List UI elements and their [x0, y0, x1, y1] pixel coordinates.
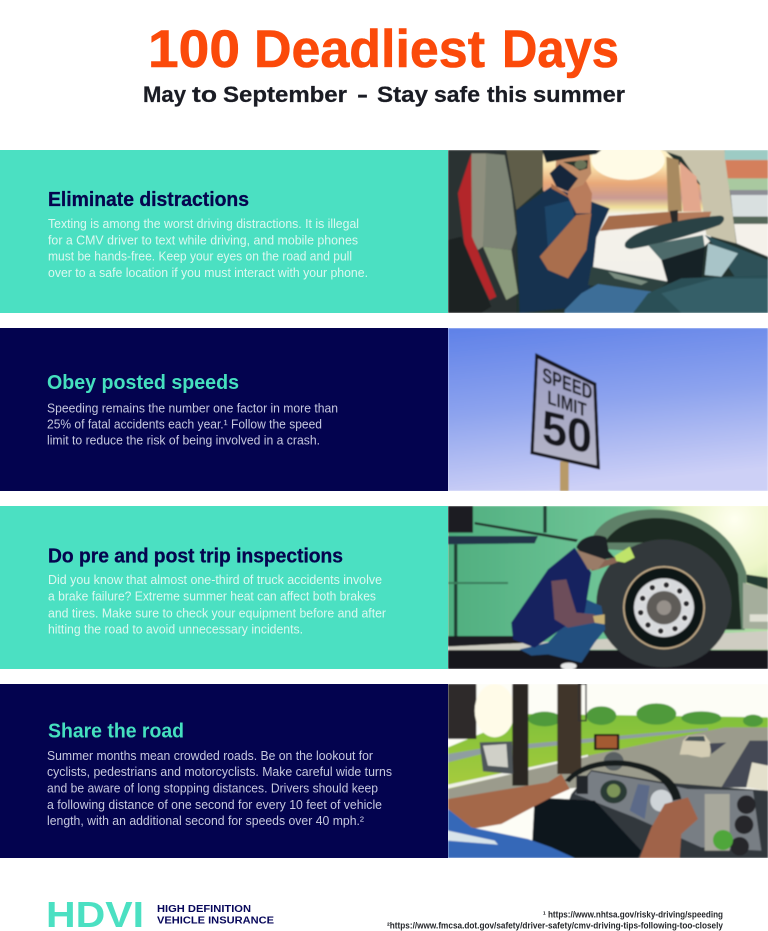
panel: share the road: [0, 684, 768, 858]
icon: steering wheel: [531, 760, 681, 858]
subtitle: Stay: [377, 82, 429, 107]
heading: inspections: Do pre and post trip inspections: [48, 546, 343, 568]
body text: inspections: and tires. Make sure to check your equipment before and after: [48, 606, 386, 620]
title: 100: [148, 20, 240, 79]
subtitle: safe: [434, 82, 480, 107]
icon: speed limit sign: SPEED: [542, 363, 592, 405]
body text: inspections: a brake failure? Extreme summer heat can affect both brakes: [48, 590, 376, 604]
icon: mechanic: [511, 535, 635, 669]
panel: obey posted speeds: [0, 328, 768, 491]
photo: speed limit sign: [448, 328, 768, 491]
icon: dashboard: [548, 762, 768, 858]
body text: share the road: and be aware of long stopping distances. Drivers should keep: [47, 782, 378, 796]
logo: [46, 894, 274, 931]
body text: share the road: Summer months mean crowded roads. Be on the lookout for: [47, 749, 373, 763]
title: [148, 20, 619, 79]
icon: speed limit sign: [530, 353, 600, 470]
icon: tire and wheel: [596, 539, 732, 667]
photo: driver on phone: [448, 150, 768, 313]
body text: obey posted speeds: 25% of fatal accidents each year.¹ Follow the speed: [47, 417, 322, 431]
body text: eliminate distractions: Texting is among the worst driving distractions. It is illegal: [48, 217, 359, 231]
subtitle: summer: [533, 82, 625, 107]
body text: obey posted speeds: limit to reduce the risk of being involved in a crash.: [47, 433, 320, 447]
icon: driver arms: [448, 774, 698, 858]
logo wordmark: HIGH DEFINITION: [157, 903, 251, 915]
body text: eliminate distractions: must be hands-free. Keep your eyes on the road and pull: [48, 250, 352, 264]
icon: side mirror: [480, 741, 513, 774]
subtitle: to: [192, 82, 217, 107]
panel: eliminate distractions: [0, 140, 768, 313]
subtitle: this: [487, 82, 527, 107]
title: Deadliest: [254, 20, 485, 79]
body text: obey posted speeds: Speeding remains the number one factor in more than: [47, 401, 338, 415]
heading: eliminate distractions: Eliminate distractions: [48, 189, 249, 211]
body text: share the road: length, with an additional second for speeds over 40 mph.²: [47, 814, 364, 828]
subtitle: [143, 82, 625, 107]
body text: obey posted speeds: [47, 401, 338, 447]
panel: inspections: [0, 433, 768, 669]
icon: speed limit sign: 50: [542, 401, 592, 465]
body text: share the road: cyclists, pedestrians and motorcyclists. Make careful wide turns: [47, 765, 392, 779]
footnotes: [387, 910, 723, 930]
heading: share the road: Share the road: [48, 720, 184, 742]
icon: speed limit sign: LIMIT: [547, 387, 587, 422]
body text: eliminate distractions: over to a safe location if you must interact with your phone.: [48, 266, 368, 280]
body text: eliminate distractions: for a CMV driver to text while driving, and mobile phones: [48, 234, 358, 248]
logo wordmark: VEHICLE INSURANCE: [157, 914, 274, 926]
heading: obey posted speeds: Obey posted speeds: [47, 372, 239, 394]
subtitle: May: [143, 82, 187, 107]
subtitle: -: [357, 82, 368, 107]
body text: share the road: [47, 749, 392, 828]
footnotes: ¹ https://www.nhtsa.gov/risky-driving/speeding: [543, 910, 723, 920]
title: Days: [502, 20, 619, 79]
subtitle: September: [223, 82, 347, 107]
photo: view from truck cab: [448, 684, 768, 858]
body text: inspections: [48, 573, 386, 636]
icon: gps unit: [594, 734, 619, 750]
logo wordmark: [157, 903, 274, 926]
body text: inspections: Did you know that almost one-third of truck accidents involve: [48, 573, 382, 587]
body text: inspections: hitting the road to avoid unnecessary incidents.: [48, 622, 303, 636]
photo: tire inspection: [448, 506, 768, 669]
footnotes: ²https://www.fmcsa.dot.gov/safety/driver-safety/cmv-driving-tips-following-too-closely: [387, 920, 723, 930]
icon: sign post: [560, 461, 569, 491]
icon: car ahead: [680, 735, 726, 757]
body text: eliminate distractions: [48, 217, 368, 280]
body text: share the road: a following distance of one second for every 10 feet of vehicle: [47, 798, 382, 812]
